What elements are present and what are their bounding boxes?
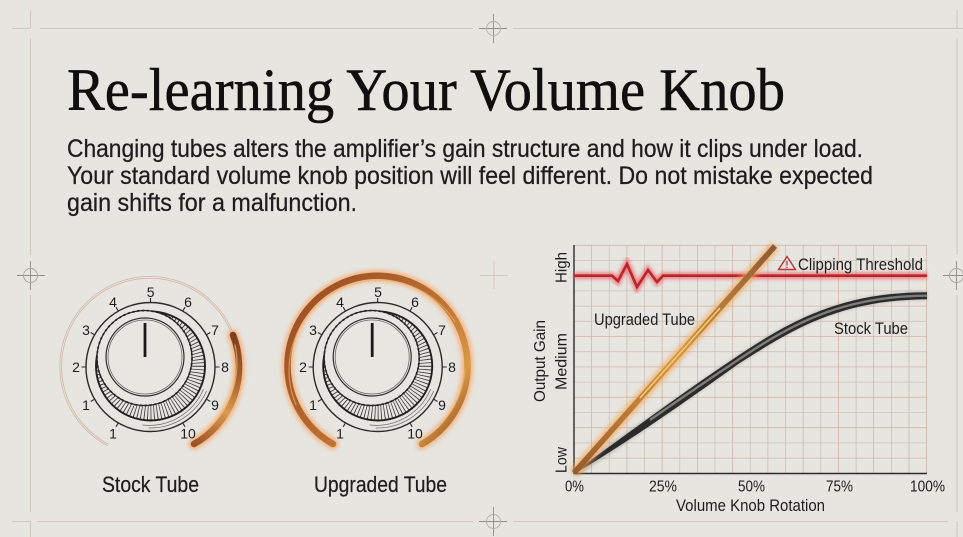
warning icon — [778, 256, 796, 270]
dial numbers: 8 — [221, 359, 229, 375]
panel: stock tube knob — [61, 277, 239, 497]
x axis title: Volume Knob Rotation — [676, 497, 825, 515]
intro text block: Your standard volume knob position will feel different. Do not mistake expected — [67, 162, 873, 190]
dial numbers: 6 — [411, 294, 419, 310]
chart grid — [574, 245, 927, 473]
dial numbers: 3 — [309, 322, 317, 338]
chart axes — [574, 245, 927, 474]
intro text block: gain shifts for a malfunction. — [67, 189, 357, 217]
dial numbers: 2 — [72, 359, 80, 375]
label: upgraded tube: Upgraded Tube — [314, 472, 447, 497]
intro text block: Changing tubes alters the amplifier’s gain structure and how it clips under load. — [67, 135, 863, 163]
dial numbers: 7 — [438, 322, 446, 338]
label: stock tube curve: Stock Tube — [834, 320, 908, 338]
y axis labels: Output Gain — [532, 320, 549, 402]
label: clipping threshold: Clipping Threshold — [798, 256, 923, 274]
dial numbers: 3 — [82, 322, 90, 338]
dial numbers: 5 — [374, 284, 382, 300]
dial numbers: 1 — [82, 397, 90, 413]
x axis tick labels: 25% — [649, 478, 677, 496]
dial numbers — [299, 284, 456, 442]
dial numbers: 4 — [336, 294, 344, 310]
x axis tick labels: 0% — [565, 478, 584, 496]
dial numbers: 4 — [109, 294, 117, 310]
dial numbers: 5 — [147, 284, 155, 300]
dial numbers: 7 — [211, 322, 219, 338]
dial numbers: 6 — [184, 294, 192, 310]
title: Re-learning Your Volume Knob — [67, 57, 785, 123]
dial numbers: 1 — [309, 397, 317, 413]
dial numbers — [72, 284, 229, 442]
dial numbers: 9 — [438, 397, 446, 413]
dial numbers: 2 — [299, 359, 307, 375]
x axis tick labels: 75% — [826, 478, 853, 496]
y axis labels: High — [554, 252, 571, 283]
knob drawing — [82, 298, 220, 432]
dial numbers: 10 — [407, 426, 423, 442]
y axis labels — [532, 252, 571, 473]
stock tube curve — [574, 292, 927, 474]
clipping threshold line — [574, 264, 927, 287]
y axis labels: Medium — [554, 333, 571, 390]
dial numbers: 1 — [336, 426, 344, 442]
dial numbers: 1 — [109, 426, 117, 442]
x axis tick labels: 50% — [738, 478, 765, 496]
upgraded tube line — [574, 246, 775, 473]
dial numbers: 8 — [448, 359, 456, 375]
dial numbers: 10 — [180, 426, 196, 442]
label: stock tube: Stock Tube — [102, 472, 199, 497]
copper active arc — [194, 335, 239, 444]
unused range arc — [61, 277, 233, 445]
x axis tick labels — [565, 478, 945, 496]
line chart: gain versus rotation — [532, 245, 945, 515]
y axis labels: Low — [554, 447, 571, 473]
knob drawing — [309, 298, 447, 432]
panel: upgraded tube knob — [288, 276, 468, 497]
intro text block — [67, 135, 873, 217]
label: upgraded tube curve: Upgraded Tube — [594, 311, 695, 329]
x axis tick labels: 100% — [910, 478, 945, 496]
copper full range arc — [288, 276, 468, 444]
dial numbers: 9 — [211, 397, 219, 413]
